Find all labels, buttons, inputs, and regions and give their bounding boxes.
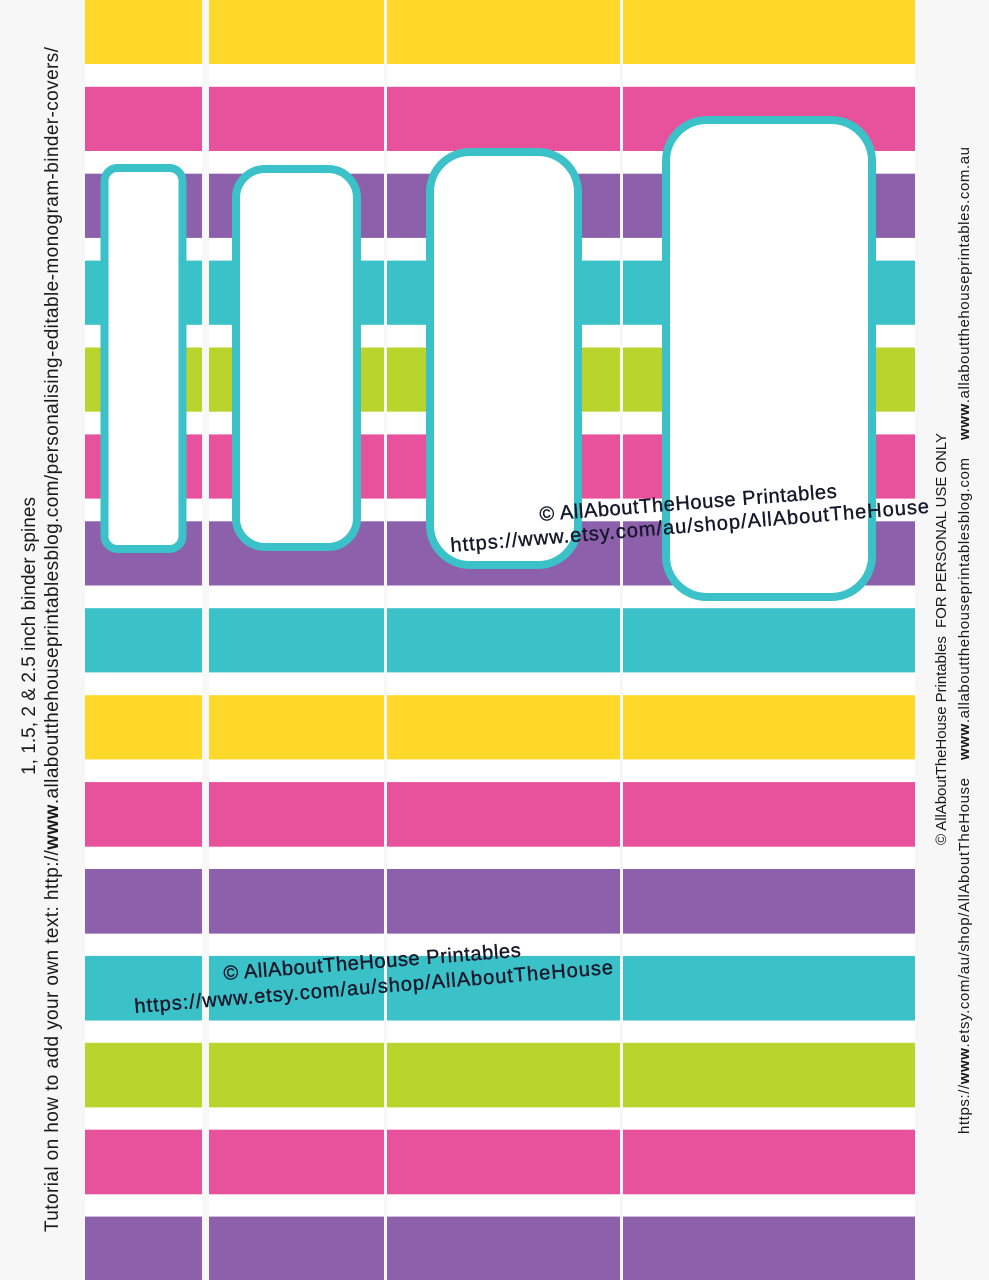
stripe: purple: [85, 174, 915, 238]
left caption: binder sizes: 1, 1.5, 2 & 2.5 inch binder spines: [19, 497, 40, 775]
stripe: purple: [85, 1217, 915, 1280]
stripe: yellow: [85, 695, 915, 759]
right caption: web links: www.allaboutthehouseprintables.com.au: [956, 147, 973, 441]
label frame: 2.5 inch spine: [666, 120, 872, 597]
stripe: pink: [85, 1130, 915, 1194]
stripe: pink: [85, 782, 915, 847]
stripe: pink: [85, 87, 915, 151]
stripe: teal: [85, 261, 915, 325]
stripe: purple: [85, 521, 915, 586]
stripe: yellow: [85, 0, 915, 64]
left caption: tutorial link: Tutorial on how to add your own text: http://www.allaboutthehouseprintablesblog.com/personalising-editable-monogram-binder-covers/: [42, 46, 63, 1232]
label frame: 2 inch spine: [430, 152, 578, 565]
watermark: lower left: © AllAboutTheHouse Printables: [223, 940, 521, 985]
label frame: 1 inch spine: [104, 168, 182, 549]
stripe: purple: [85, 869, 915, 934]
stripe: teal: [85, 608, 915, 672]
watermark: upper right: https://www.etsy.com/au/shop/AllAboutTheHouse: [450, 496, 930, 557]
right caption: web links: www.allaboutthehouseprintablesblog.com: [956, 458, 973, 761]
label frame: 1.5 inch spine: [236, 169, 357, 547]
stripe: teal: [85, 956, 915, 1020]
stripe: lime: [85, 1043, 915, 1107]
right caption: web links: https://www.etsy.com/au/shop/AllAboutTheHouse: [956, 778, 973, 1134]
stripe: pink: [85, 434, 915, 499]
watermark: upper right: © AllAboutTheHouse Printables: [539, 481, 837, 526]
right caption: copyright: © AllAboutTheHouse Printables FOR PERSONAL USE ONLY: [933, 433, 950, 845]
stripe: lime: [85, 348, 915, 412]
right caption: web links: [956, 147, 973, 1134]
watermark: lower left: https://www.etsy.com/au/shop/AllAboutTheHouse: [134, 957, 614, 1018]
